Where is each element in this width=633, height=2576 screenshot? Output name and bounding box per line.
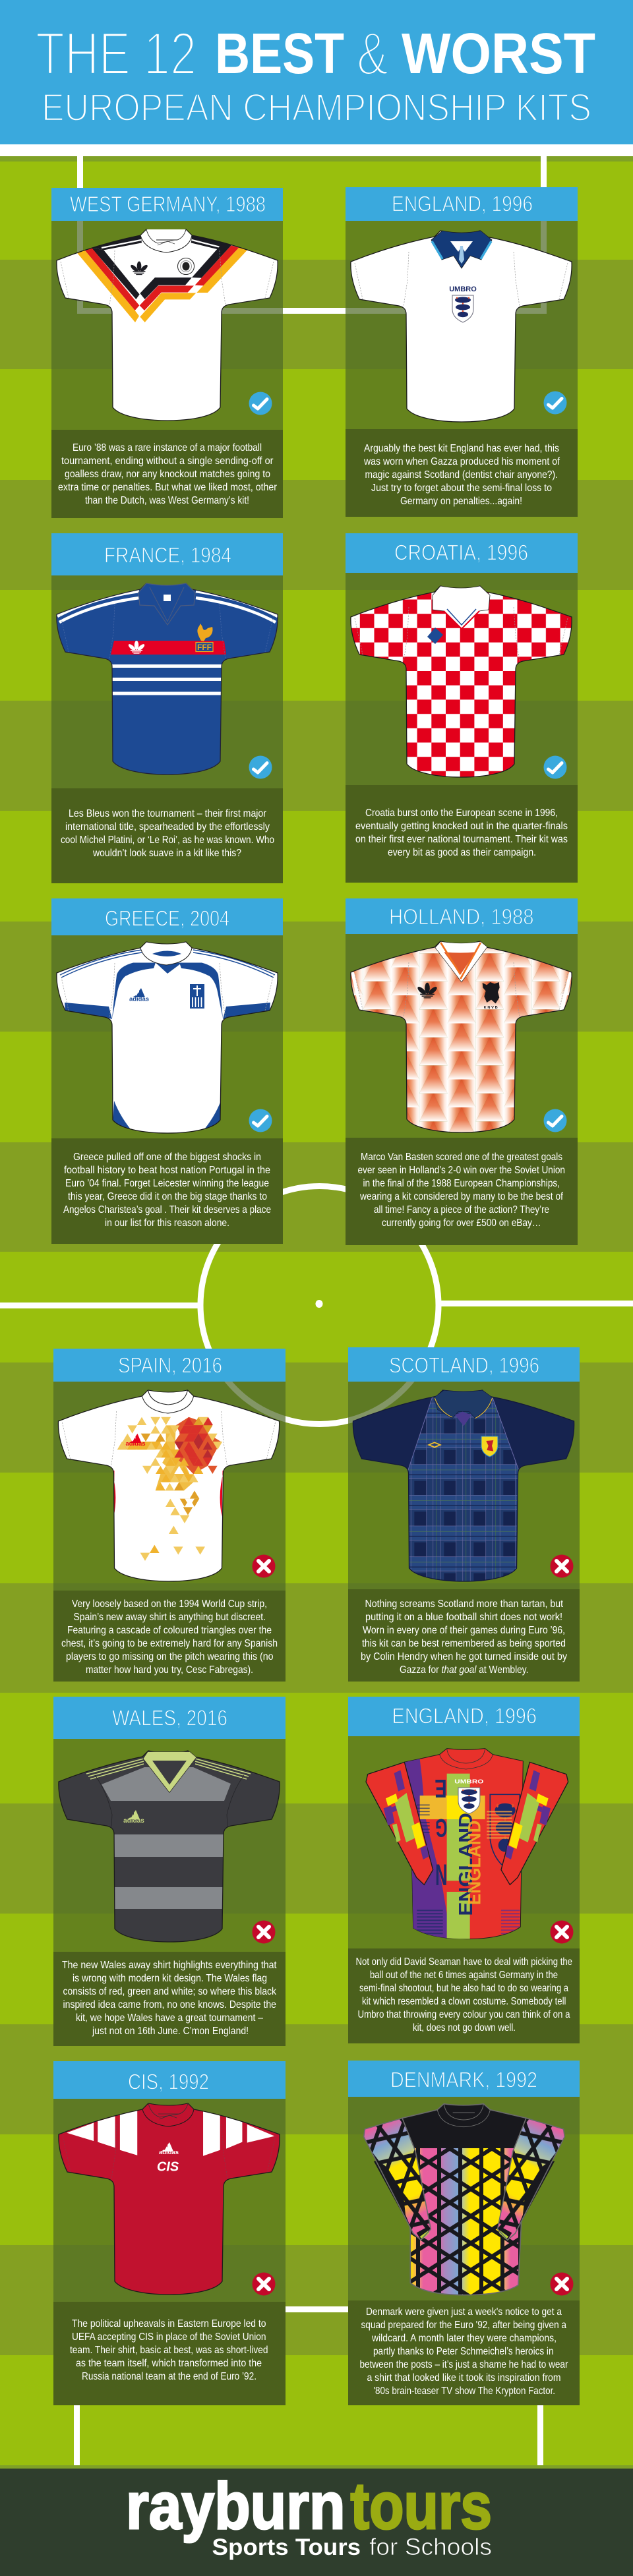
logo: adidas: adidas [125,1440,146,1448]
heading: England 1996: ENGLAND, 1996 [392,191,533,216]
heading: Greece 2004 [51,898,283,935]
big letters [435,1774,447,1891]
heading: Spain 2016 [53,1349,286,1382]
description: Featuring a cascade of coloured triangles over the [67,1625,272,1636]
description: every bit as good as their campaign. [388,847,536,858]
description: Arguably the best kit England has ever had, this [364,443,559,454]
description: on their first ever national tournament. Their kit was [355,834,568,845]
logo: trefoil [417,983,438,998]
shirt: Wales [59,1751,280,1942]
shirt: England [351,231,572,422]
description: partly thanks to Peter Schmeichel’s heroics in [373,2346,554,2357]
icon: tick [543,392,567,414]
big letters: G [435,1813,447,1842]
description: Very loosely based on the 1994 World Cup strip, [72,1598,267,1610]
description: Marco Van Basten scored one of the greatest goals [361,1152,562,1163]
description: Germany on penalties...again! [400,496,522,507]
description [51,430,283,518]
card: Wales 2016 [53,1697,286,2046]
description: in our list for this reason alone. [105,1217,229,1229]
shirt: West Germany [57,229,278,421]
description: magic against Scotland (dentist chair anyone?). [365,469,558,481]
footer: Rayburn Tours logo: tours [351,2469,492,2543]
card: Holland 1988 [346,898,578,1245]
description: between the posts – it’s just a shame he had to wear [360,2359,568,2370]
description: consists of red, green and white; so where this black [63,1986,277,1997]
title banner: & [357,20,388,88]
logo: adidas [129,988,149,1003]
description: just not on 16th June. C’mon England! [92,2026,249,2037]
description: Gazza for that goal at Wembley. [400,1664,529,1676]
description [346,429,578,517]
shirt: Croatia [351,586,572,777]
title banner: THE 12 [36,20,196,88]
description: in the final of the 1988 European Championships, [363,1178,560,1189]
description: Umbro that throwing every colour you can think of on a [357,2009,570,2020]
logo: adidas [159,2142,179,2156]
icon: tick [543,1109,567,1132]
crest: England [458,1788,480,1814]
description: all time! Fancy a piece of the action? They’re [374,1204,549,1215]
card: Greece 2004 [51,898,283,1244]
description: Greece pulled off one of the biggest shocks in [73,1152,261,1163]
kit panel [348,1382,580,1589]
shirt: CIS [59,2103,280,2295]
shirt: England goalkeeper: ENGLAND [464,1821,484,1905]
description: than the Dutch, was West Germany’s kit! [85,495,249,506]
description: wildcard. A month later they were champions, [371,2333,557,2344]
heading: Denmark 1992: DENMARK, 1992 [390,2067,537,2092]
description: Angelos Charistea’s goal . Their kit deserves a place [63,1204,271,1215]
title banner: BEST [215,22,344,86]
heading: Holland 1988 [346,898,578,934]
heading: England 1996 goalkeeper [348,1697,580,1736]
description: currently going for over £500 on eBay… [382,1217,541,1229]
icon: tick [249,755,272,779]
crest: Greek flag [190,984,204,1009]
heading: Denmark 1992 [348,2061,580,2097]
kit panel [51,575,283,788]
description: a shirt that looked like it took its inspiration from [367,2372,560,2384]
description: Nothing screams Scotland more than tartan, but [365,1598,563,1610]
description: Just try to forget about the semi-final loss to [371,483,552,494]
kit panel [51,935,283,1138]
description: '80s brain-teaser TV show The Krypton Factor. [373,2386,555,2397]
logo: adidas [123,1810,144,1825]
description: kit which resembled a clown costume. Somebody tell [362,1996,566,2007]
description: team. Their shirt, basic at best, was as short-lived [70,2345,268,2356]
description: was worn when Gazza produced his moment of [363,456,560,467]
heading: Greece 2004: GREECE, 2004 [105,906,229,931]
shirt: Denmark [364,2104,564,2298]
description [348,1948,580,2043]
description: is wrong with modern kit design. The Wales flag [73,1973,267,1984]
kit panel [346,573,578,785]
logo: Umbro: UMBRO [454,1778,484,1785]
shirt: France [57,583,278,775]
heading: France 1984 [51,533,283,575]
description: kit, does not go down well. [413,2022,516,2034]
description: players to go missing on the pitch wearing this (no [66,1651,274,1662]
description: wouldn’t look suave in a kit like this? [92,848,241,859]
heading: Wales 2016 [53,1697,286,1739]
logo: adidas: adidas [159,2149,179,2156]
description: Euro ’88 was a rare instance of a major football [73,442,262,454]
description: international title, spearheaded by the effortlessly [65,821,270,833]
description: cool Michel Platini, or ‘Le Roi’, as he was known. Who [61,834,274,846]
card: CIS 1992 [53,2061,286,2405]
description: this year, Greece did it on the big stage thanks to [68,1191,267,1202]
heading: West Germany 1988 [51,188,283,221]
kit panel [53,1739,286,1952]
logo: adidas: adidas [123,1817,144,1825]
title banner: WORST [402,22,595,86]
card: Croatia 1996 [346,533,578,883]
shirt: Holland [351,941,572,1132]
heading: Spain 2016: SPAIN, 2016 [118,1353,222,1378]
shirt: Scotland [353,1390,574,1582]
description: UEFA accepting CIS in place of the Soviet Union [72,2331,266,2343]
description: putting it on a blue football shirt does not work! [365,1612,562,1623]
description: kit, we hope Wales have a great tournament – [76,2012,263,2024]
icon: tick [249,1109,272,1132]
card: Scotland 1996 [348,1347,580,1682]
text: CIS: CIS [157,2159,179,2174]
icon: tick [543,755,567,779]
description: squad prepared for the Euro '92, after being given a [361,2320,566,2331]
description: Worn in every one of their games during Euro ’96, [363,1625,565,1636]
shirt: England goalkeeper [366,1749,568,1939]
card: England 1996 [346,187,578,517]
description: Croatia burst onto the European scene in 1996, [365,807,558,819]
card: France 1984 [51,533,283,883]
kit panel [51,221,283,430]
heading: England 1996 goalkeeper: ENGLAND, 1996 [392,1703,537,1728]
icon: cross [252,1921,276,1943]
big letters: N [435,1858,447,1891]
card: England 1996 goalkeeper [348,1697,580,2043]
heading: England 1996 [346,187,578,221]
heading: Holland 1988: HOLLAND, 1988 [389,904,534,929]
description: Denmark were given just a week's notice to get a [366,2306,562,2318]
description: Euro ’04 final. Forget Leicester winning the league [65,1178,269,1189]
footer: Rayburn Tours logo: rayburn [126,2469,346,2543]
description: wearing a kit considered by many to be the best of [359,1191,563,1202]
description: inspired idea came from, no one knows. Despite the [63,1999,276,2010]
description [346,1138,578,1245]
icon: tick [249,392,272,415]
kit panel [348,2097,580,2300]
description [348,2300,580,2405]
description: ever seen in Holland's 2-0 win over the Soviet Union [357,1165,565,1176]
description: Russia national team at the end of Euro ’92. [82,2371,256,2382]
cockerel [197,624,213,641]
kit panel [346,221,578,429]
text: ENGLAND: ENGLAND [456,1813,477,1916]
description [51,788,283,883]
description [346,785,578,883]
footer: Rayburn Tours logo: for Schools [369,2533,492,2560]
logo: adidas [125,1434,146,1448]
kit panel [348,1736,580,1948]
description: by Colin Hendry when he got turned inside out by [361,1651,567,1662]
description: goalless draw, nor any knockout matches going to [65,469,270,480]
description: matter how hard you try, Cesc Fabregas). [86,1664,253,1676]
crest: England [452,295,473,322]
title banner [0,0,633,144]
icon: cross [252,1554,276,1578]
description: ball out of the net 6 times against Germany in the [370,1970,558,1981]
heading: Scotland 1996: SCOTLAND, 1996 [389,1353,539,1378]
heading: West Germany 1988: WEST GERMANY, 1988 [70,192,266,216]
shirt: Greece [57,942,278,1133]
heading: France 1984: FRANCE, 1984 [104,543,231,567]
heading: Wales 2016: WALES, 2016 [112,1706,227,1730]
description: extra time or penalties. But what we liked most, other [58,482,278,493]
shirt: Spain [58,1390,280,1581]
icon: cross [550,1554,574,1578]
description [53,1952,286,2046]
card: Denmark 1992 [348,2061,580,2405]
icon: cross [252,2273,276,2295]
shirt: Holland: KNVB [484,1006,498,1010]
icon: cross [550,2273,574,2295]
heading: Scotland 1996 [348,1347,580,1382]
description [348,1589,580,1682]
card: Spain 2016 [53,1349,286,1682]
description: The political upheavals in Eastern Europe led to [72,2318,266,2329]
crest: German FA [178,258,194,274]
logo: adidas: adidas [129,995,149,1003]
footer: Rayburn Tours logo: Sports Tours [212,2534,361,2560]
description: The new Wales away shirt highlights everything that [62,1960,277,1971]
heading: CIS 1992 [53,2061,286,2099]
description: chest, it’s going to be extremely hard for any Spanish [61,1638,278,1649]
kit panel [53,1382,286,1591]
heading: Croatia 1996 [346,533,578,573]
crest: FFF: FFF [197,643,212,652]
icon: cross [550,1921,574,1943]
description: Spain’s new away shirt is anything but discreet. [74,1612,266,1623]
description: Les Bleus won the tournament – their first major [69,808,267,819]
description: football history to beat host nation Portugal in the [64,1165,270,1176]
footer: Rayburn Tours logo [0,2465,633,2576]
card: West Germany 1988 [51,188,283,518]
description: eventually getting knocked out in the quarter-finals [355,821,568,832]
logo: trefoil [127,641,146,654]
description [51,1138,283,1244]
heading: Croatia 1996: CROATIA, 1996 [394,541,528,564]
description: as the team itself, which transformed into the [76,2358,262,2369]
description [53,1591,286,1682]
logo: Lotto [427,628,443,644]
description: this kit can be best remembered as being sported [362,1638,566,1649]
description [53,2302,286,2405]
description: Not only did David Seaman have to deal with picking the [356,1956,572,1968]
description: tournament, ending without a single sending-off or [61,455,274,467]
kit panel [346,934,578,1138]
logo: Umbro: UMBRO [449,285,477,293]
logo: trefoil [130,261,148,275]
heading: CIS 1992: CIS, 1992 [128,2070,209,2093]
big letters: E [435,1774,447,1803]
description: semi-final shootout, but he also had to do so wearing a [359,1983,568,1994]
kit panel [53,2099,286,2302]
triangle pattern [117,1417,222,1561]
